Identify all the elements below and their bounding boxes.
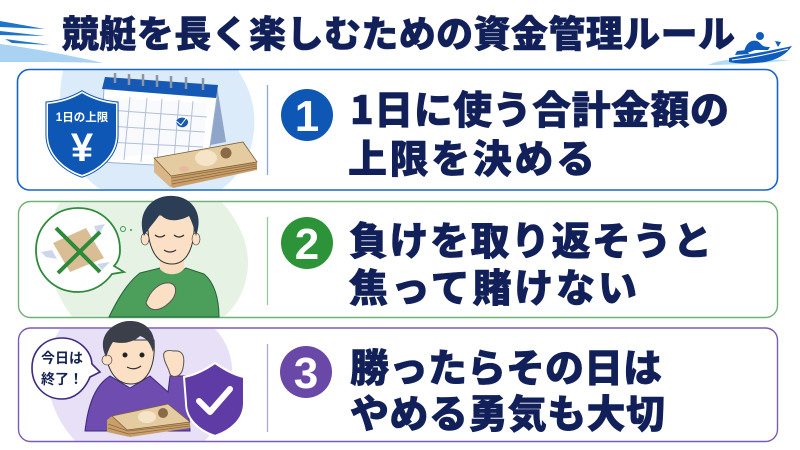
illustration: man in purple hoodie bbox=[85, 321, 190, 431]
panel 1 frame bbox=[18, 70, 778, 190]
bubble text: 今日は bbox=[41, 350, 83, 366]
illustration: calm man with hand on chest bbox=[109, 196, 219, 317]
text: rule 2: 負けを取り返そうと bbox=[349, 211, 712, 267]
text: rule 3: やめる勇気も大切 bbox=[350, 384, 665, 440]
icon: desk calendar bbox=[100, 73, 226, 168]
divider bbox=[266, 344, 268, 432]
text: rule 2 bbox=[349, 211, 712, 314]
title: 競艇を長く楽しむための資金管理ルール bbox=[62, 4, 735, 58]
divider bbox=[266, 217, 268, 305]
text: rule 3 bbox=[350, 338, 665, 440]
icon: speech bubble with crossed money bbox=[36, 208, 132, 292]
panel 3 frame bbox=[18, 328, 778, 442]
number badge 1 bbox=[281, 89, 333, 141]
divider bbox=[266, 85, 268, 175]
number badge 3 bbox=[280, 346, 332, 398]
icon: banknote stack bbox=[154, 142, 257, 188]
icon: speech bubble bbox=[32, 338, 100, 399]
text: rule 2: 焦って賭けない bbox=[349, 258, 637, 314]
icon: speech bubble: 終了！ bbox=[41, 371, 83, 387]
icon: shield with check bbox=[184, 363, 244, 436]
panel 2 frame bbox=[18, 202, 778, 318]
icon: banknote stack bbox=[107, 404, 190, 437]
yen symbol: ¥ bbox=[71, 126, 94, 170]
icon: shield with yen bbox=[46, 91, 118, 177]
number badge 2 bbox=[281, 217, 333, 269]
panel 1: daily limit bbox=[18, 70, 778, 190]
text: rule 1: 1日に使う合計金額の bbox=[350, 80, 729, 136]
text: rule 1 bbox=[348, 80, 729, 185]
text: rule 1: 上限を決める bbox=[348, 129, 595, 185]
decoration: speed lines top left bbox=[0, 21, 103, 63]
panel 2: do not chase losses bbox=[18, 196, 778, 318]
panel 3: stop after winning bbox=[18, 321, 778, 442]
number badge 2: 2 bbox=[295, 220, 319, 269]
panel 3 background circle bbox=[47, 329, 232, 440]
number badge 3: 3 bbox=[294, 349, 318, 398]
panel 2 background circle bbox=[47, 202, 248, 316]
text: rule 3: 勝ったらその日は bbox=[350, 338, 662, 394]
number badge 1: 1 bbox=[295, 92, 319, 141]
icon: speedboat bbox=[708, 32, 792, 65]
panel 1 background circle bbox=[60, 70, 254, 189]
shield label: 1日の上限 bbox=[56, 111, 109, 124]
